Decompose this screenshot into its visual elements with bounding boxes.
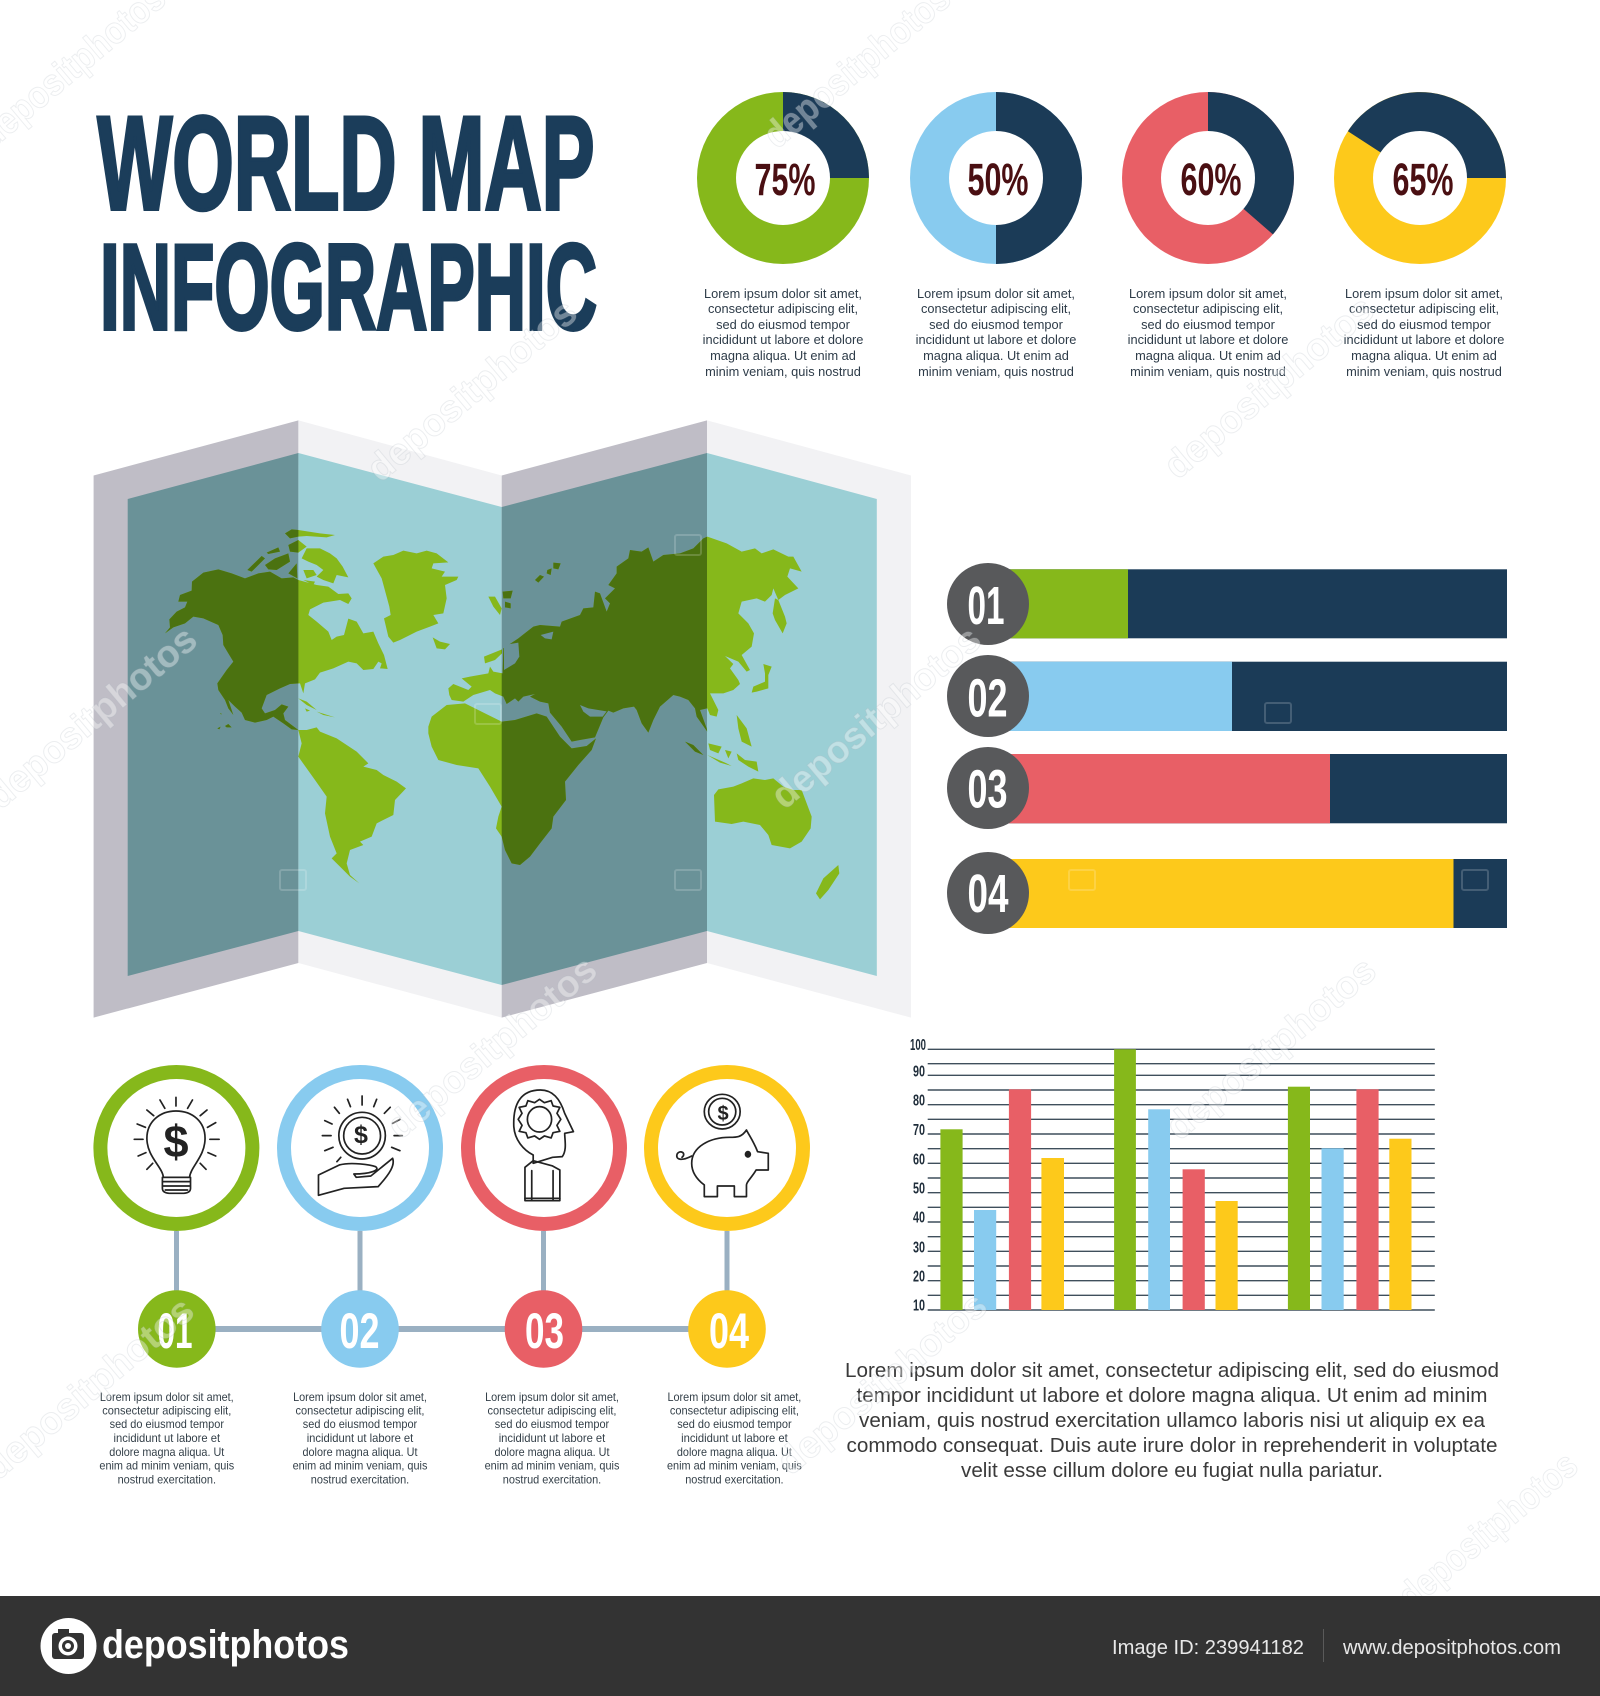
ring: red: [468, 1072, 620, 1224]
text block: donut 1: sed do eiusmod tempor: [716, 317, 851, 332]
text block: step 02: sed do eiusmod tempor: [303, 1417, 417, 1431]
chart axis labels: 20: [913, 1269, 925, 1286]
donut chart: 75%: [697, 92, 869, 264]
text block: donut 2: Lorem ipsum dolor sit amet,: [917, 286, 1075, 301]
text block: donut 2: [916, 286, 1076, 379]
text block: donut 3: Lorem ipsum dolor sit amet,: [1129, 286, 1287, 301]
text block: chart description: velit esse cillum dolore eu fugiat nulla pariatur.: [961, 1460, 1383, 1482]
text block: step 04: enim ad minim veniam, quis: [667, 1458, 802, 1472]
footer brand name: depositphotos: [102, 1623, 349, 1667]
donut chart: 75%: 75%: [754, 154, 816, 205]
icon: hand holding coin: [318, 1096, 402, 1195]
icon: depositphotos logo: [40, 1618, 96, 1674]
text block: step 03: [485, 1390, 619, 1486]
text block: donut 3: sed do eiusmod tempor: [1141, 317, 1276, 332]
donut chart: 65%: 65%: [1392, 154, 1454, 205]
bar 01: 01: [968, 576, 1004, 636]
ring: green: [100, 1072, 252, 1224]
donut chart: 65%: [1334, 92, 1506, 264]
step 04: [688, 1290, 766, 1368]
icon: piggy bank with coin: [677, 1094, 768, 1197]
text block: chart description: veniam, quis nostrud exercitation ullamco laboris nisi ut aliquip ex ea: [859, 1410, 1486, 1432]
text block: donut 2: magna aliqua. Ut enim ad: [923, 348, 1069, 363]
footer divider: [1323, 1629, 1324, 1662]
text block: step 01: dolore magna aliqua. Ut: [109, 1445, 225, 1459]
text block: donut 1: Lorem ipsum dolor sit amet,: [704, 286, 862, 301]
chart axis labels: 50: [913, 1181, 925, 1198]
text block: donut 3: [1128, 286, 1288, 379]
text block: step 03: enim ad minim veniam, quis: [485, 1458, 619, 1472]
stock watermark overlay: depositphotos: [769, 1284, 995, 1483]
text block: step 03: incididunt ut labore et: [499, 1431, 606, 1445]
text block: step 03: nostrud exercitation.: [503, 1472, 601, 1486]
text block: donut 2: consectetur adipiscing elit,: [921, 301, 1071, 316]
panel: folded world map: [94, 420, 911, 1018]
step 04: 04: [709, 1303, 749, 1359]
text block: step 01: sed do eiusmod tempor: [110, 1417, 224, 1431]
stock watermark overlay: depositphotos: [1156, 288, 1382, 487]
step 01: 01: [158, 1303, 192, 1359]
text block: step 03: consectetur adipiscing elit,: [488, 1404, 616, 1418]
chart axis labels: 40: [913, 1210, 925, 1227]
bar 03: [947, 747, 1507, 829]
text block: step 02: nostrud exercitation.: [311, 1472, 409, 1486]
icon: hand holding coin: $: [354, 1121, 368, 1149]
chart axis labels: 60: [913, 1151, 925, 1168]
title: [98, 90, 597, 355]
icon: light bulb with dollar: $: [163, 1116, 189, 1167]
icon: light bulb with dollar: [134, 1097, 219, 1193]
icon: piggy bank with coin: $: [717, 1103, 729, 1125]
text block: chart description: commodo consequat. Duis aute irure dolor in reprehenderit in voluptate: [846, 1435, 1498, 1457]
ring: yellow: [651, 1072, 803, 1224]
text block: donut 2: minim veniam, quis nostrud: [918, 364, 1074, 379]
chart group 2: [1114, 1049, 1238, 1310]
chart axis labels: 80: [913, 1093, 925, 1110]
footer bar: [0, 1596, 1600, 1696]
text block: step 02: enim ad minim veniam, quis: [293, 1458, 427, 1472]
panel: icon timeline: [99, 1072, 803, 1486]
text block: donut 4: magna aliqua. Ut enim ad: [1351, 348, 1497, 363]
stock watermark overlay: depositphotos: [1158, 949, 1384, 1148]
text block: step 03: sed do eiusmod tempor: [495, 1417, 609, 1431]
text block: step 04: incididunt ut labore et: [681, 1431, 788, 1445]
step 02: [321, 1290, 399, 1368]
panel: numbered progress bars: [947, 563, 1507, 934]
stock watermark overlay: depositphotos: [359, 291, 585, 490]
chart axis labels: 100: [910, 1037, 926, 1054]
text block: donut 3: magna aliqua. Ut enim ad: [1135, 348, 1281, 363]
timeline connectors: [174, 1231, 730, 1332]
panel: donut charts: [697, 92, 1506, 379]
icon: head with gear: [514, 1090, 573, 1201]
stock watermark overlay: depositphotos: [379, 948, 605, 1147]
bar 02: [947, 655, 1507, 737]
step 02: 02: [340, 1303, 380, 1359]
text block: donut 4: [1344, 286, 1504, 379]
text block: step 02: dolore magna aliqua. Ut: [302, 1445, 418, 1459]
watermark camera marks: [280, 535, 1488, 890]
stock watermark overlay: depositphotos: [763, 618, 989, 817]
bar 04: [947, 852, 1507, 934]
text block: donut 1: consectetur adipiscing elit,: [708, 301, 858, 316]
text block: step 03: Lorem ipsum dolor sit amet,: [485, 1390, 619, 1404]
bar chart: [910, 1037, 1435, 1315]
text block: donut 1: [703, 286, 863, 379]
text block: donut 2: sed do eiusmod tempor: [929, 317, 1064, 332]
step 01: [138, 1290, 216, 1368]
text block: donut 1: minim veniam, quis nostrud: [705, 364, 861, 379]
text block: donut 1: magna aliqua. Ut enim ad: [710, 348, 856, 363]
donut chart: 50%: [910, 92, 1082, 264]
text block: donut 4: Lorem ipsum dolor sit amet,: [1345, 286, 1503, 301]
text block: step 02: [293, 1390, 427, 1486]
chart axis labels: 10: [913, 1298, 925, 1315]
text block: step 02: consectetur adipiscing elit,: [296, 1404, 424, 1418]
text block: step 04: consectetur adipiscing elit,: [670, 1404, 799, 1418]
text block: step 02: Lorem ipsum dolor sit amet,: [293, 1390, 427, 1404]
text block: donut 2: incididunt ut labore et dolore: [916, 332, 1076, 347]
text block: step 01: consectetur adipiscing elit,: [102, 1404, 231, 1418]
text block: step 03: dolore magna aliqua. Ut: [494, 1445, 610, 1459]
text block: step 01: [99, 1390, 234, 1486]
text block: donut 1: incididunt ut labore et dolore: [703, 332, 863, 347]
chart axis labels: 90: [913, 1063, 925, 1080]
text block: donut 4: consectetur adipiscing elit,: [1349, 301, 1499, 316]
bar 04: 04: [968, 864, 1008, 924]
chart group 1: [940, 1089, 1064, 1310]
chart group 3: [1288, 1087, 1412, 1310]
chart axis labels: 30: [913, 1239, 925, 1256]
text block: donut 3: minim veniam, quis nostrud: [1130, 364, 1286, 379]
map sea: [128, 453, 877, 985]
text block: chart description: tempor incididunt ut labore et dolore magna aliqua. Ut enim ad minim: [856, 1385, 1488, 1407]
text block: step 04: nostrud exercitation.: [685, 1472, 784, 1486]
text block: step 02: incididunt ut labore et: [307, 1431, 414, 1445]
title: WORLD MAP: [98, 90, 594, 238]
text block: donut 4: minim veniam, quis nostrud: [1346, 364, 1502, 379]
title: INFOGRAPHIC: [100, 219, 597, 355]
bar 03: 03: [968, 760, 1008, 820]
footer url: www.depositphotos.com: [1342, 1637, 1561, 1659]
step 03: 03: [525, 1303, 564, 1359]
text block: chart description: Lorem ipsum dolor sit amet, consectetur adipiscing elit, sed do eiusmod: [845, 1360, 1499, 1382]
text block: chart description: [845, 1360, 1499, 1482]
donut chart: 60%: 60%: [1180, 154, 1242, 205]
bar 02: 02: [968, 668, 1008, 728]
text block: donut 3: incididunt ut labore et dolore: [1128, 332, 1288, 347]
text block: step 04: Lorem ipsum dolor sit amet,: [668, 1390, 801, 1404]
text block: step 04: [667, 1390, 802, 1486]
text block: step 01: enim ad minim veniam, quis: [99, 1458, 234, 1472]
chart axis labels: 70: [913, 1122, 925, 1139]
text block: step 01: incididunt ut labore et: [114, 1431, 221, 1445]
footer image id: Image ID: 239941182: [1112, 1637, 1304, 1659]
chart grid lines: [928, 1049, 1435, 1310]
text block: step 01: nostrud exercitation.: [118, 1472, 216, 1486]
text block: step 01: Lorem ipsum dolor sit amet,: [100, 1390, 234, 1404]
map continents: [165, 529, 839, 899]
text block: donut 4: incididunt ut labore et dolore: [1344, 332, 1504, 347]
text block: step 04: dolore magna aliqua. Ut: [677, 1445, 792, 1459]
text block: donut 4: sed do eiusmod tempor: [1357, 317, 1492, 332]
donut chart: 60%: [1122, 92, 1294, 264]
step 03: [505, 1290, 582, 1368]
ring: blue: [284, 1072, 436, 1224]
chart axis labels: [910, 1037, 926, 1315]
text block: donut 3: consectetur adipiscing elit,: [1133, 301, 1283, 316]
bar 01: [947, 563, 1507, 645]
text block: step 04: sed do eiusmod tempor: [677, 1417, 792, 1431]
map paper folds: [94, 420, 911, 1018]
donut chart: 50%: 50%: [968, 154, 1028, 205]
